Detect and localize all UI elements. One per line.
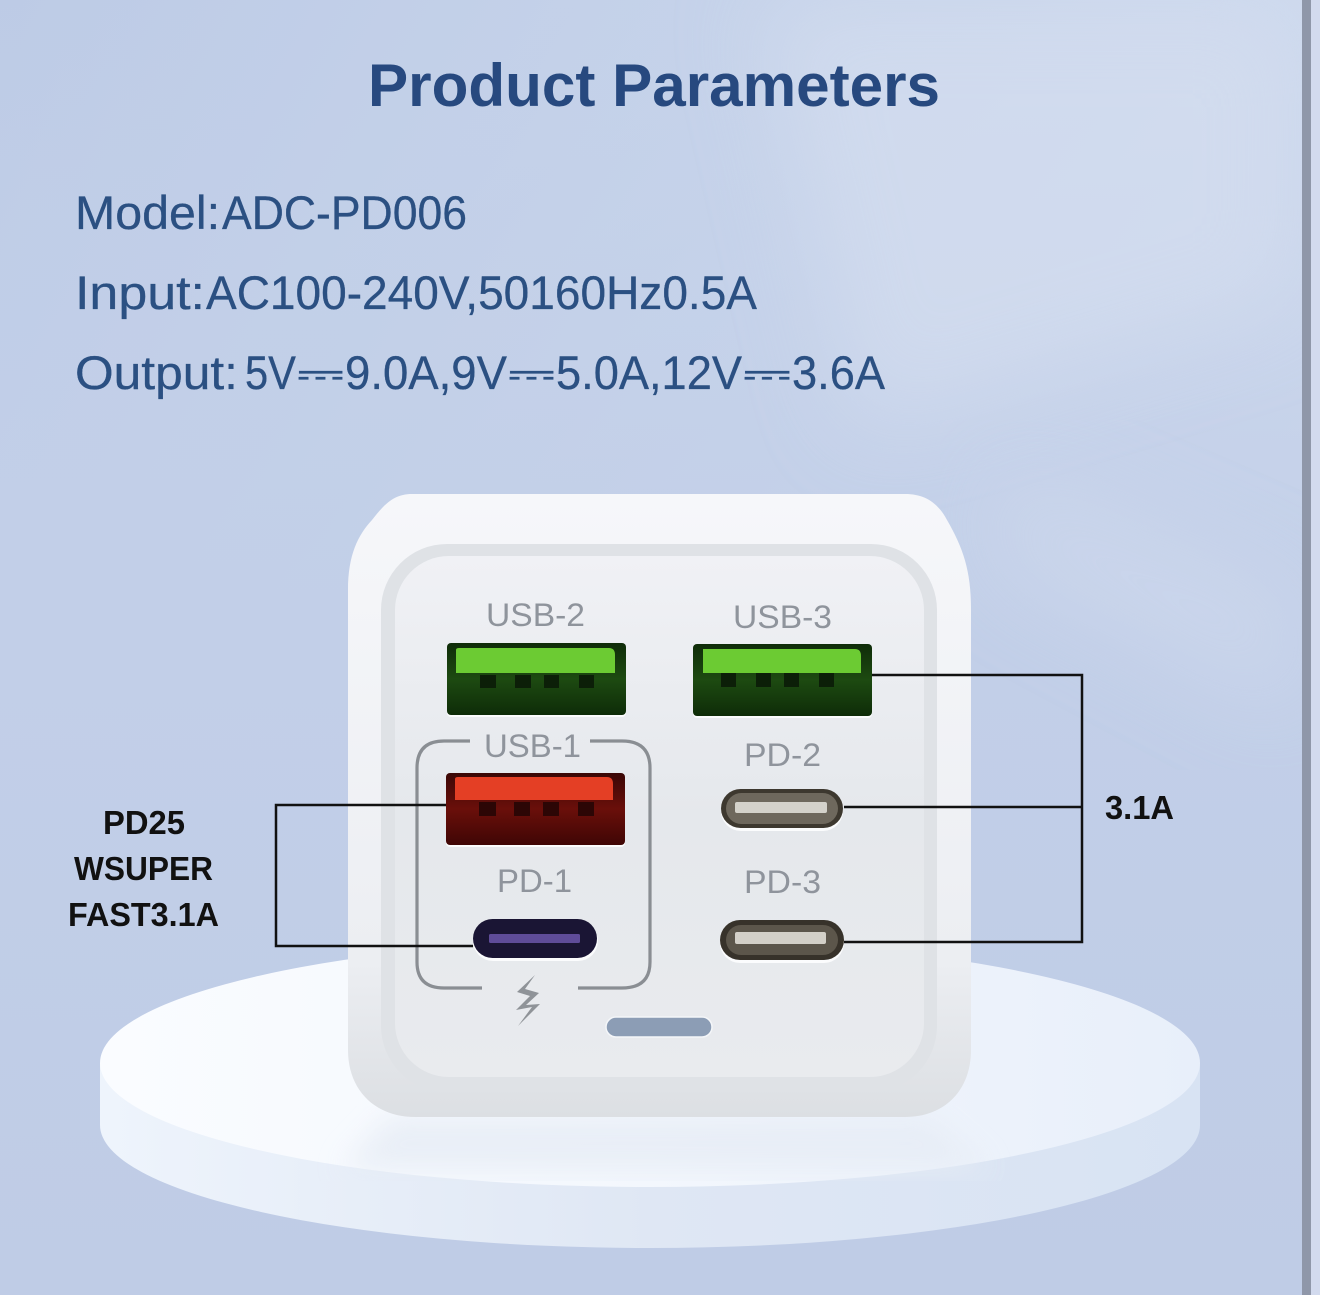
callout: PD25 left label: PD25 — [103, 804, 185, 841]
model line — [75, 186, 467, 239]
title: Product Parameters — [368, 52, 940, 119]
output line: ⎓ — [508, 346, 555, 399]
input line: AC100-240V,50160Hz0.5A — [206, 266, 758, 319]
port: PD-2 type-c — [721, 789, 843, 831]
output line: 5V — [245, 346, 297, 399]
output line: 5.0A,12V — [556, 346, 743, 399]
indicator LED — [606, 1017, 712, 1037]
callout: PD25 left label: WSUPER — [74, 850, 213, 887]
input line: Input: — [75, 266, 205, 319]
output line: ⎓ — [743, 346, 791, 399]
port: USB-1 red — [446, 773, 625, 847]
USB-1 group bracket — [417, 741, 650, 988]
charger body — [348, 494, 971, 1117]
output line: 9.0A,9V — [345, 346, 508, 399]
model line: Model: — [75, 186, 220, 239]
port label: PD-1: PD-1 — [497, 863, 572, 899]
port label: USB-2: USB-2 — [486, 597, 585, 633]
port: PD-3 type-c — [720, 920, 844, 963]
output line — [75, 346, 886, 399]
icon: lightning bolt — [516, 975, 540, 1026]
callout: PD25 left label — [68, 804, 219, 933]
callout: 3.1A right label: 3.1A — [1105, 789, 1174, 826]
port label: USB-3: USB-3 — [733, 599, 832, 635]
model line: ADC-PD006 — [222, 186, 467, 239]
port: USB-2 green — [447, 643, 626, 717]
port label: PD-2: PD-2 — [744, 737, 821, 773]
output line: ⎓ — [297, 346, 344, 399]
output line: 3.6A — [792, 346, 886, 399]
port label: PD-3: PD-3 — [744, 864, 821, 900]
text block: specifications — [75, 186, 886, 399]
connector lines left — [276, 805, 473, 946]
port label: USB-1: USB-1 — [484, 728, 581, 764]
output line: Output: — [75, 346, 238, 399]
port: PD-1 type-c — [473, 919, 598, 961]
port: USB-3 green — [693, 644, 872, 718]
connector lines right — [844, 675, 1082, 942]
platform disc — [100, 939, 1200, 1248]
callout: PD25 left label: FAST3.1A — [68, 896, 219, 933]
